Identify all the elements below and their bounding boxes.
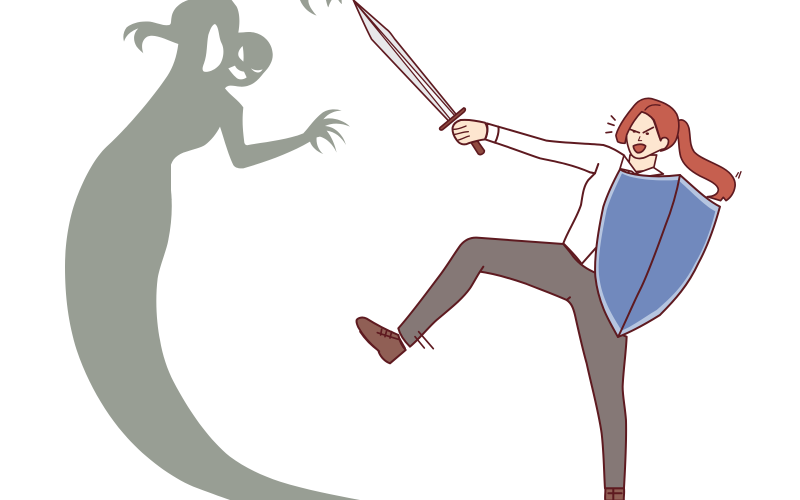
sword — [353, 0, 484, 155]
sword blade — [353, 0, 457, 122]
shadow torso and arm — [107, 0, 350, 200]
motion lines at ankle — [415, 332, 433, 349]
face — [627, 112, 669, 158]
ankle — [398, 337, 405, 348]
sword grip — [468, 135, 484, 155]
shirt collar — [620, 155, 663, 177]
woman — [356, 98, 741, 500]
open mouth — [633, 144, 646, 153]
surprise marks — [606, 116, 615, 133]
sword guard — [440, 108, 465, 130]
shadow eyes and mouth — [228, 46, 263, 79]
shadow tail — [65, 147, 360, 500]
shadow upper body with head and clawed hand — [107, 0, 350, 200]
eyes and brows — [630, 127, 653, 133]
trousers — [398, 238, 627, 488]
shield ridge — [618, 175, 680, 337]
neck — [628, 155, 657, 172]
swish marks — [736, 172, 741, 178]
blade fuller — [354, 1, 455, 120]
shadow lifted claw — [300, 0, 342, 16]
shadow hair gap — [203, 24, 223, 72]
shirt sleeve and torso — [495, 127, 630, 264]
shield rim — [595, 169, 720, 337]
shield face — [599, 173, 715, 331]
hair strand line — [645, 105, 660, 110]
hand — [453, 120, 487, 144]
trousers and legs — [356, 233, 627, 500]
raised shoe — [356, 317, 406, 363]
ponytail — [677, 120, 735, 201]
shield — [595, 169, 720, 337]
shoe laces and sole — [360, 329, 398, 351]
sleeve fold — [590, 164, 598, 173]
shirt cuff — [485, 123, 499, 143]
trouser knee crease — [480, 233, 598, 300]
shoe on planted foot — [605, 488, 624, 500]
nose — [638, 137, 642, 141]
head — [606, 98, 741, 201]
shadow monster silhouette — [65, 0, 360, 500]
hair — [616, 98, 679, 151]
upper body — [453, 120, 630, 264]
fingers — [454, 126, 469, 140]
